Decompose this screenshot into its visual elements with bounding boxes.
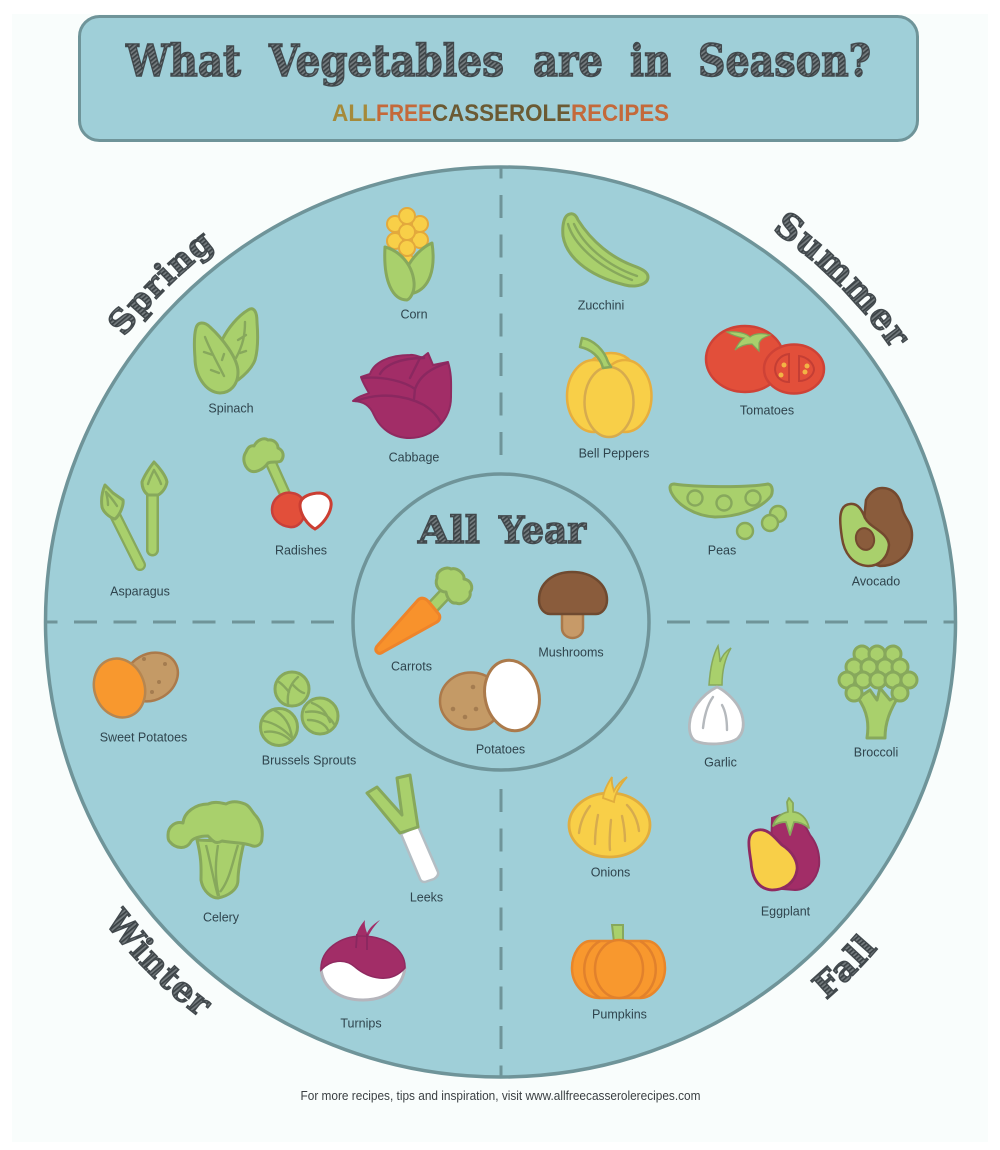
season label: Fall: Fall	[810, 932, 878, 1000]
label: Peas: Peas	[708, 544, 736, 558]
title: What	[125, 36, 242, 87]
logo wordmark	[332, 100, 669, 127]
icon: celery	[168, 802, 262, 898]
label: Pumpkins: Pumpkins	[592, 1008, 647, 1022]
icon: tomatoes	[706, 326, 824, 394]
label: Cabbage: Cabbage	[389, 450, 439, 464]
label: Corn: Corn	[400, 308, 428, 322]
label: Eggplant: Eggplant	[761, 904, 811, 918]
label: Onions: Onions	[591, 866, 630, 880]
main seasons wheel	[46, 167, 956, 1078]
icon: brussels sprouts	[260, 672, 338, 746]
label: Brussels Sprouts: Brussels Sprouts	[262, 754, 356, 768]
icon: cabbage	[353, 353, 451, 438]
icon: potato	[440, 655, 546, 736]
icon: carrot	[376, 568, 472, 653]
icon: asparagus	[102, 462, 167, 565]
label: Zucchini: Zucchini	[578, 298, 624, 312]
icon: spinach	[194, 309, 258, 393]
icon: radishes	[244, 439, 331, 529]
icon: bell pepper	[567, 338, 652, 437]
label: Celery: Celery	[203, 910, 240, 924]
label: Potatoes: Potatoes	[476, 742, 525, 756]
label: Garlic: Garlic	[704, 756, 737, 770]
icon: zucchini	[563, 214, 648, 286]
label: Carrots: Carrots	[391, 660, 432, 674]
title	[125, 36, 871, 87]
label: Radishes: Radishes	[275, 544, 327, 558]
logo wordmark: FREE	[376, 100, 432, 127]
label: Sweet Potatoes: Sweet Potatoes	[100, 730, 187, 744]
icon: sweet potatoes	[86, 643, 187, 725]
heading: all year	[417, 508, 586, 552]
footer note: For more recipes, tips and inspiration, visit www.allfreecasserolerecipes.com	[300, 1089, 700, 1103]
season label: Winter: Winter	[109, 905, 212, 1016]
label: Broccoli: Broccoli	[854, 746, 898, 760]
logo wordmark: ALL	[332, 100, 376, 127]
label: Leeks: Leeks	[410, 890, 443, 904]
icon: mushroom	[539, 572, 607, 638]
icon: broccoli	[839, 646, 917, 738]
title: Season?	[698, 36, 871, 87]
label: Tomatoes: Tomatoes	[740, 404, 794, 418]
icon: turnip	[321, 920, 405, 1000]
season label: Summer: Summer	[774, 212, 908, 346]
icon: garlic	[689, 646, 743, 744]
logo wordmark: RECIPES	[571, 100, 669, 127]
label: Asparagus: Asparagus	[110, 584, 170, 598]
panel: all year circle	[353, 474, 649, 770]
title: are	[533, 36, 603, 87]
icon: corn	[385, 208, 433, 300]
icon: avocado	[840, 488, 912, 566]
season label: Spring: Spring	[108, 232, 214, 336]
icon: leeks	[367, 775, 438, 882]
title: Vegetables	[268, 36, 504, 87]
label: Bell Peppers: Bell Peppers	[579, 446, 649, 460]
label: Spinach: Spinach	[208, 402, 254, 416]
icon: onion	[569, 777, 650, 857]
heading: all year: Year	[498, 508, 586, 552]
icon: eggplant	[749, 798, 819, 890]
logo wordmark: CASSEROLE	[432, 100, 571, 127]
label: Turnips: Turnips	[340, 1016, 382, 1030]
label: Mushrooms: Mushrooms	[538, 646, 604, 660]
icon: pumpkin	[572, 925, 665, 998]
header banner	[80, 16, 918, 140]
title: in	[630, 36, 671, 87]
heading: all year: All	[417, 508, 480, 552]
icon: peas	[670, 484, 786, 539]
label: Avocado: Avocado	[852, 574, 900, 588]
